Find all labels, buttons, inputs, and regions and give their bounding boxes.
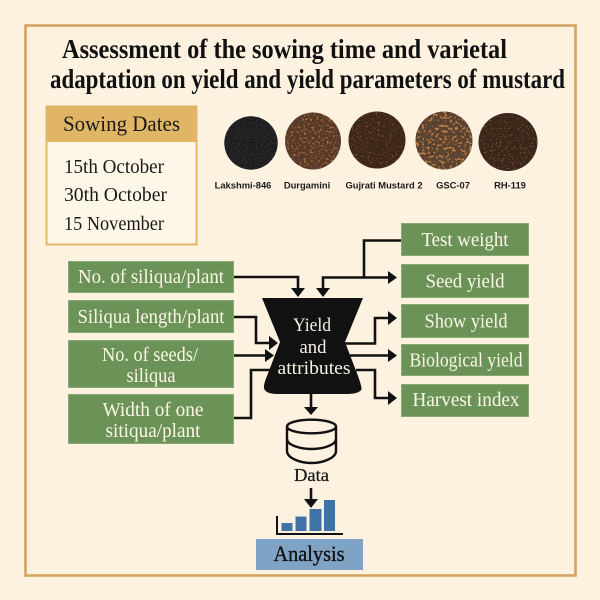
output: Show yield xyxy=(402,304,528,338)
sowing dates header xyxy=(46,106,197,142)
output: Biological yield: Biological yield xyxy=(410,350,522,372)
arrow: funnel to data xyxy=(304,394,318,415)
title: Assessment of the sowing time and varietal xyxy=(62,33,507,64)
input: Width of one sitiqua/plant xyxy=(68,394,234,444)
seed: Durgamini: Durgamini xyxy=(284,180,330,190)
seed: RH-119 xyxy=(478,113,538,190)
arrow: funnel to biological yield xyxy=(350,349,397,362)
arrow: width to funnel xyxy=(234,370,272,418)
input: Width of one sitiqua/plant: Width of one xyxy=(102,399,204,421)
funnel: yield and attributes: Yield xyxy=(293,315,331,336)
seed: Gujrati Mustard 2 xyxy=(345,112,423,190)
output: Test weight xyxy=(402,224,528,256)
output: Seed yield: Seed yield xyxy=(426,270,504,292)
input: No. of seeds/siliqua: No. of seeds/ xyxy=(102,344,198,366)
analysis box xyxy=(256,539,363,570)
funnel: yield and attributes xyxy=(262,298,363,394)
seed: Lakshmi-846: Lakshmi-846 xyxy=(215,180,271,190)
sowing dates list: 30th October xyxy=(64,184,167,206)
sowing dates list: 15th October xyxy=(64,156,164,178)
arrow: seeds to funnel xyxy=(234,349,274,362)
input: Siliqua length/plant xyxy=(68,300,234,332)
output: Test weight: Test weight xyxy=(422,229,509,251)
arrow: siliqua count to funnel xyxy=(234,277,305,297)
input: No. of siliqua/plant: No. of siliqua/plant xyxy=(78,266,224,288)
output: Biological yield xyxy=(402,344,528,376)
seed: GSC-07 xyxy=(416,112,472,190)
analysis box: Analysis xyxy=(274,541,344,566)
seed: RH-119: RH-119 xyxy=(494,180,526,190)
input: No. of seeds/siliqua: siliqua xyxy=(126,365,176,387)
input: No. of seeds/siliqua xyxy=(68,340,234,388)
seed: Lakshmi-846 xyxy=(215,116,278,190)
icon: bar chart xyxy=(277,500,343,534)
panel: sowing dates xyxy=(46,106,197,244)
sowing dates list xyxy=(64,156,167,235)
arrow: test weight to funnel and seed yield xyxy=(316,240,401,297)
funnel: yield and attributes: attributes xyxy=(278,358,350,379)
funnel: yield and attributes: and xyxy=(300,337,327,358)
arrow: data to analysis xyxy=(304,488,318,508)
seed varieties xyxy=(215,112,538,190)
seed: Gujrati Mustard 2: Gujrati Mustard 2 xyxy=(345,180,423,190)
sowing dates heading: Sowing Dates xyxy=(63,111,180,136)
data label: Data xyxy=(294,465,329,485)
input: Width of one sitiqua/plant: sitiqua/plant xyxy=(106,420,201,442)
sowing dates list: 15 November xyxy=(64,213,164,235)
seed: Durgamini xyxy=(284,112,341,190)
arrow: siliqua length to funnel xyxy=(234,317,278,350)
icon: database xyxy=(287,420,336,463)
title xyxy=(50,33,565,94)
output: Harvest index: Harvest index xyxy=(412,389,520,411)
output: Harvest index xyxy=(402,384,528,416)
arrow: funnel to show yield xyxy=(345,311,397,344)
input: No. of siliqua/plant xyxy=(68,262,234,292)
input: Siliqua length/plant: Siliqua length/plant xyxy=(78,306,225,328)
output: Seed yield xyxy=(402,264,528,298)
output: Show yield: Show yield xyxy=(424,310,508,332)
arrow: funnel to harvest index xyxy=(356,370,397,405)
seed: GSC-07: GSC-07 xyxy=(436,180,470,190)
